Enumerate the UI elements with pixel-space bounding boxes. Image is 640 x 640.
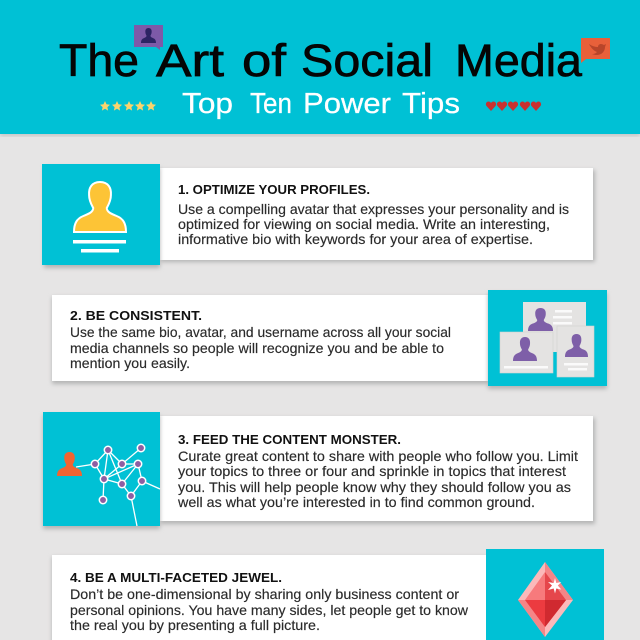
icon: network graph — [76, 444, 160, 526]
title: Art — [156, 35, 225, 86]
icon: five hearts — [486, 102, 541, 111]
text: tip 1 body — [178, 202, 569, 247]
title: Media — [455, 35, 583, 86]
text: tip 3 body: well as what you’re interested in to find common ground. — [177, 495, 535, 510]
text: tip 2 body: Use the same bio, avatar, and username across all your social — [70, 325, 451, 340]
panel: tip 4 — [52, 549, 604, 640]
subtitle — [182, 88, 460, 120]
text: tip 4 body: Don’t be one-dimensional by sharing only business content or — [70, 587, 459, 602]
subtitle: Power — [303, 88, 391, 120]
icon: three profile cards — [500, 302, 594, 377]
panel: tip 2 — [52, 290, 607, 389]
panel: tip 1 — [42, 164, 595, 268]
subtitle: Ten — [250, 88, 292, 120]
icon: orange person — [57, 452, 82, 476]
text: tip 3 body: you. This will help people know why they should follow you as — [178, 480, 571, 495]
text: tip 1 body: informative bio with keywords for your area of expertise. — [178, 232, 533, 247]
text: tip 1 body: optimized for viewing on social media. Write an interesting, — [178, 217, 550, 232]
heading: tip 2: 2. BE CONSISTENT. — [70, 308, 202, 323]
icon: purple profile speech bubble — [134, 25, 163, 50]
subtitle: Tips — [402, 88, 460, 120]
icon: five stars — [100, 101, 156, 111]
text: tip 4 body: the real you by presenting a full picture. — [70, 618, 320, 633]
subtitle: Top — [182, 88, 233, 120]
panel: tip 3 — [43, 412, 595, 529]
title: of — [242, 35, 287, 86]
text: tip 2 body: media channels so people will recognize you and be able to — [70, 341, 444, 356]
text: tip 3 body — [177, 449, 578, 510]
icon: red diamond jewel — [518, 562, 573, 637]
heading: tip 1: 1. OPTIMIZE YOUR PROFILES. — [178, 182, 370, 197]
text: tip 2 body — [70, 325, 451, 371]
header banner — [0, 0, 640, 136]
heading: tip 4: 4. BE A MULTI-FACETED JEWEL. — [70, 570, 282, 585]
text: tip 2 body: mention you easily. — [70, 356, 190, 371]
text: tip 1 body: Use a compelling avatar that expresses your personality and is — [178, 202, 569, 217]
text: tip 3 body: your topics to three or four and sprinkle in topics that interest — [178, 464, 566, 479]
title: The — [59, 35, 139, 86]
heading: tip 3: 3. FEED THE CONTENT MONSTER. — [178, 432, 401, 447]
icon: orange twitter speech bubble — [581, 38, 610, 63]
title — [59, 35, 583, 86]
title: Social — [301, 35, 433, 86]
text: tip 4 body: personal opinions. You have many sides, let people get to know — [70, 603, 468, 618]
icon: yellow avatar — [73, 182, 126, 252]
text: tip 4 body — [70, 587, 468, 633]
text: tip 3 body: Curate great content to share with people who follow you. Limit — [178, 449, 578, 464]
